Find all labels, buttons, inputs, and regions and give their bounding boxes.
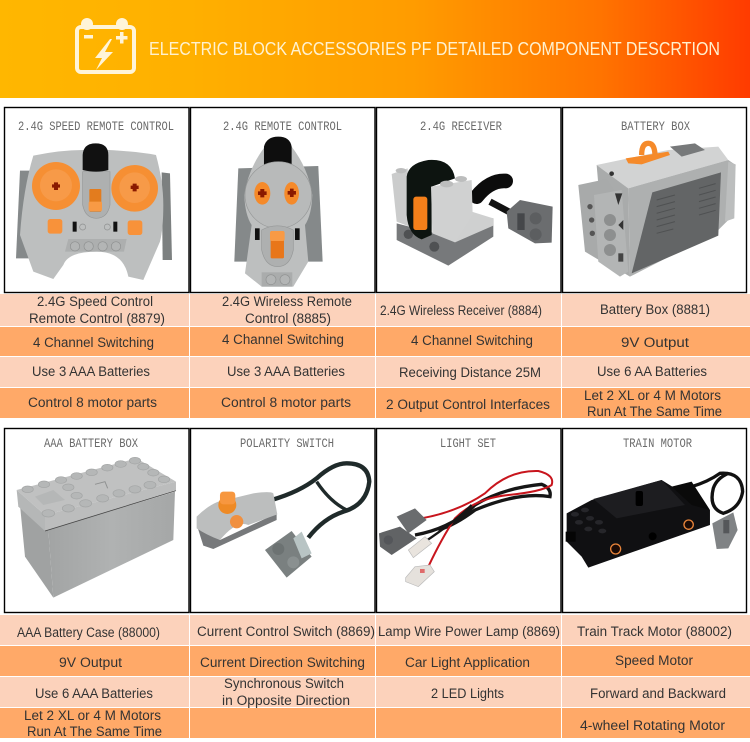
text: receiver specs: 4 Channel Switching — [411, 333, 533, 348]
text: light set specs: Car Light Application — [405, 655, 530, 670]
panel: AAA battery box — [4, 428, 189, 612]
panel: 2.4G receiver — [376, 108, 561, 292]
text: AAA box specs — [17, 625, 162, 739]
panel heading: 2.4G REMOTE CONTROL — [223, 120, 342, 134]
text: battery box specs: 9V Output — [621, 335, 689, 350]
panel: battery box — [562, 108, 746, 292]
text: battery box specs: Battery Box (8881) — [600, 302, 710, 317]
text: wireless remote specs: Control 8 motor parts — [221, 395, 351, 410]
panel: 2.4G remote control — [190, 108, 375, 292]
panel heading: AAA BATTERY BOX — [44, 437, 138, 451]
text: battery box specs — [584, 302, 722, 419]
text: polarity switch specs: in Opposite Direction — [222, 693, 350, 708]
panel heading: TRAIN MOTOR — [623, 437, 692, 451]
text: battery box specs: Run At The Same Time — [587, 404, 722, 419]
icon: polarity switch — [197, 463, 369, 578]
text: train motor specs: 4-wheel Rotating Motor — [580, 718, 726, 733]
text: AAA box specs: Let 2 XL or 4 M Motors — [24, 708, 161, 723]
icon: wireless remote — [234, 137, 323, 287]
text: receiver specs — [380, 303, 550, 412]
text: light set specs — [378, 624, 560, 701]
icon: light wires — [379, 471, 552, 587]
text: speed remote specs: Control 8 motor parts — [28, 395, 157, 410]
panel heading: 2.4G RECEIVER — [420, 120, 502, 134]
icon: battery box — [578, 143, 736, 277]
text: train motor specs: Train Track Motor (88002) — [577, 624, 732, 639]
panel heading: LIGHT SET — [440, 437, 496, 451]
text: speed remote specs: 4 Channel Switching — [33, 335, 154, 350]
text: polarity switch specs: Current Control Switch (8869) — [197, 624, 375, 639]
panel: train motor — [562, 428, 746, 612]
text: train motor specs: Forward and Backward — [590, 686, 726, 701]
text: polarity switch specs: Synchronous Switch — [224, 676, 344, 691]
text: receiver specs: Receiving Distance 25M — [399, 365, 541, 380]
text: train motor specs — [577, 624, 732, 733]
text: wireless remote specs: Use 3 AAA Batteries — [227, 364, 345, 379]
text: receiver specs: 2 Output Control Interfaces — [386, 397, 550, 412]
text: AAA box specs: Run At The Same Time — [27, 724, 162, 739]
text: wireless remote specs: 2.4G Wireless Remote — [222, 294, 352, 309]
icon: train motor — [566, 473, 743, 568]
panel heading: POLARITY SWITCH — [240, 437, 334, 451]
text: AAA box specs: AAA Battery Case (88000) — [17, 625, 160, 640]
text: speed remote specs: Use 3 AAA Batteries — [32, 364, 150, 379]
text: train motor specs: Speed Motor — [615, 653, 694, 668]
header banner — [0, 0, 750, 98]
text: light set specs: Lamp Wire Power Lamp (8869) — [378, 624, 560, 639]
text: speed remote specs — [28, 294, 165, 410]
text: receiver specs: 2.4G Wireless Receiver (8884) — [380, 303, 542, 318]
panel: polarity switch — [190, 428, 375, 612]
panel: 2.4G speed remote control — [4, 108, 189, 292]
icon: AAA battery box — [17, 457, 176, 598]
text: AAA box specs: Use 6 AAA Batteries — [35, 686, 153, 701]
text: wireless remote specs: 4 Channel Switching — [222, 332, 344, 347]
panel heading: 2.4G SPEED REMOTE CONTROL — [18, 120, 174, 134]
panel: light set — [376, 428, 561, 612]
text: speed remote specs: Remote Control (8879) — [29, 311, 165, 326]
text: battery box specs: Let 2 XL or 4 M Motors — [584, 388, 721, 403]
text: speed remote specs: 2.4G Speed Control — [37, 294, 153, 309]
text: wireless remote specs: Control (8885) — [245, 311, 331, 326]
specification table: lower rows — [0, 615, 750, 739]
panel heading: BATTERY BOX — [621, 120, 690, 134]
icon: receiver — [392, 160, 553, 266]
text: polarity switch specs — [197, 624, 375, 708]
text: AAA box specs: 9V Output — [59, 655, 122, 670]
text: polarity switch specs: Current Direction Switching — [200, 655, 365, 670]
specification table: upper rows — [0, 294, 750, 419]
icon: speed remote — [16, 143, 172, 280]
text: battery box specs: Use 6 AA Batteries — [597, 364, 707, 379]
icon: battery with lightning bolt — [77, 18, 134, 72]
text: wireless remote specs — [221, 294, 352, 410]
text: light set specs: 2 LED Lights — [431, 686, 504, 701]
